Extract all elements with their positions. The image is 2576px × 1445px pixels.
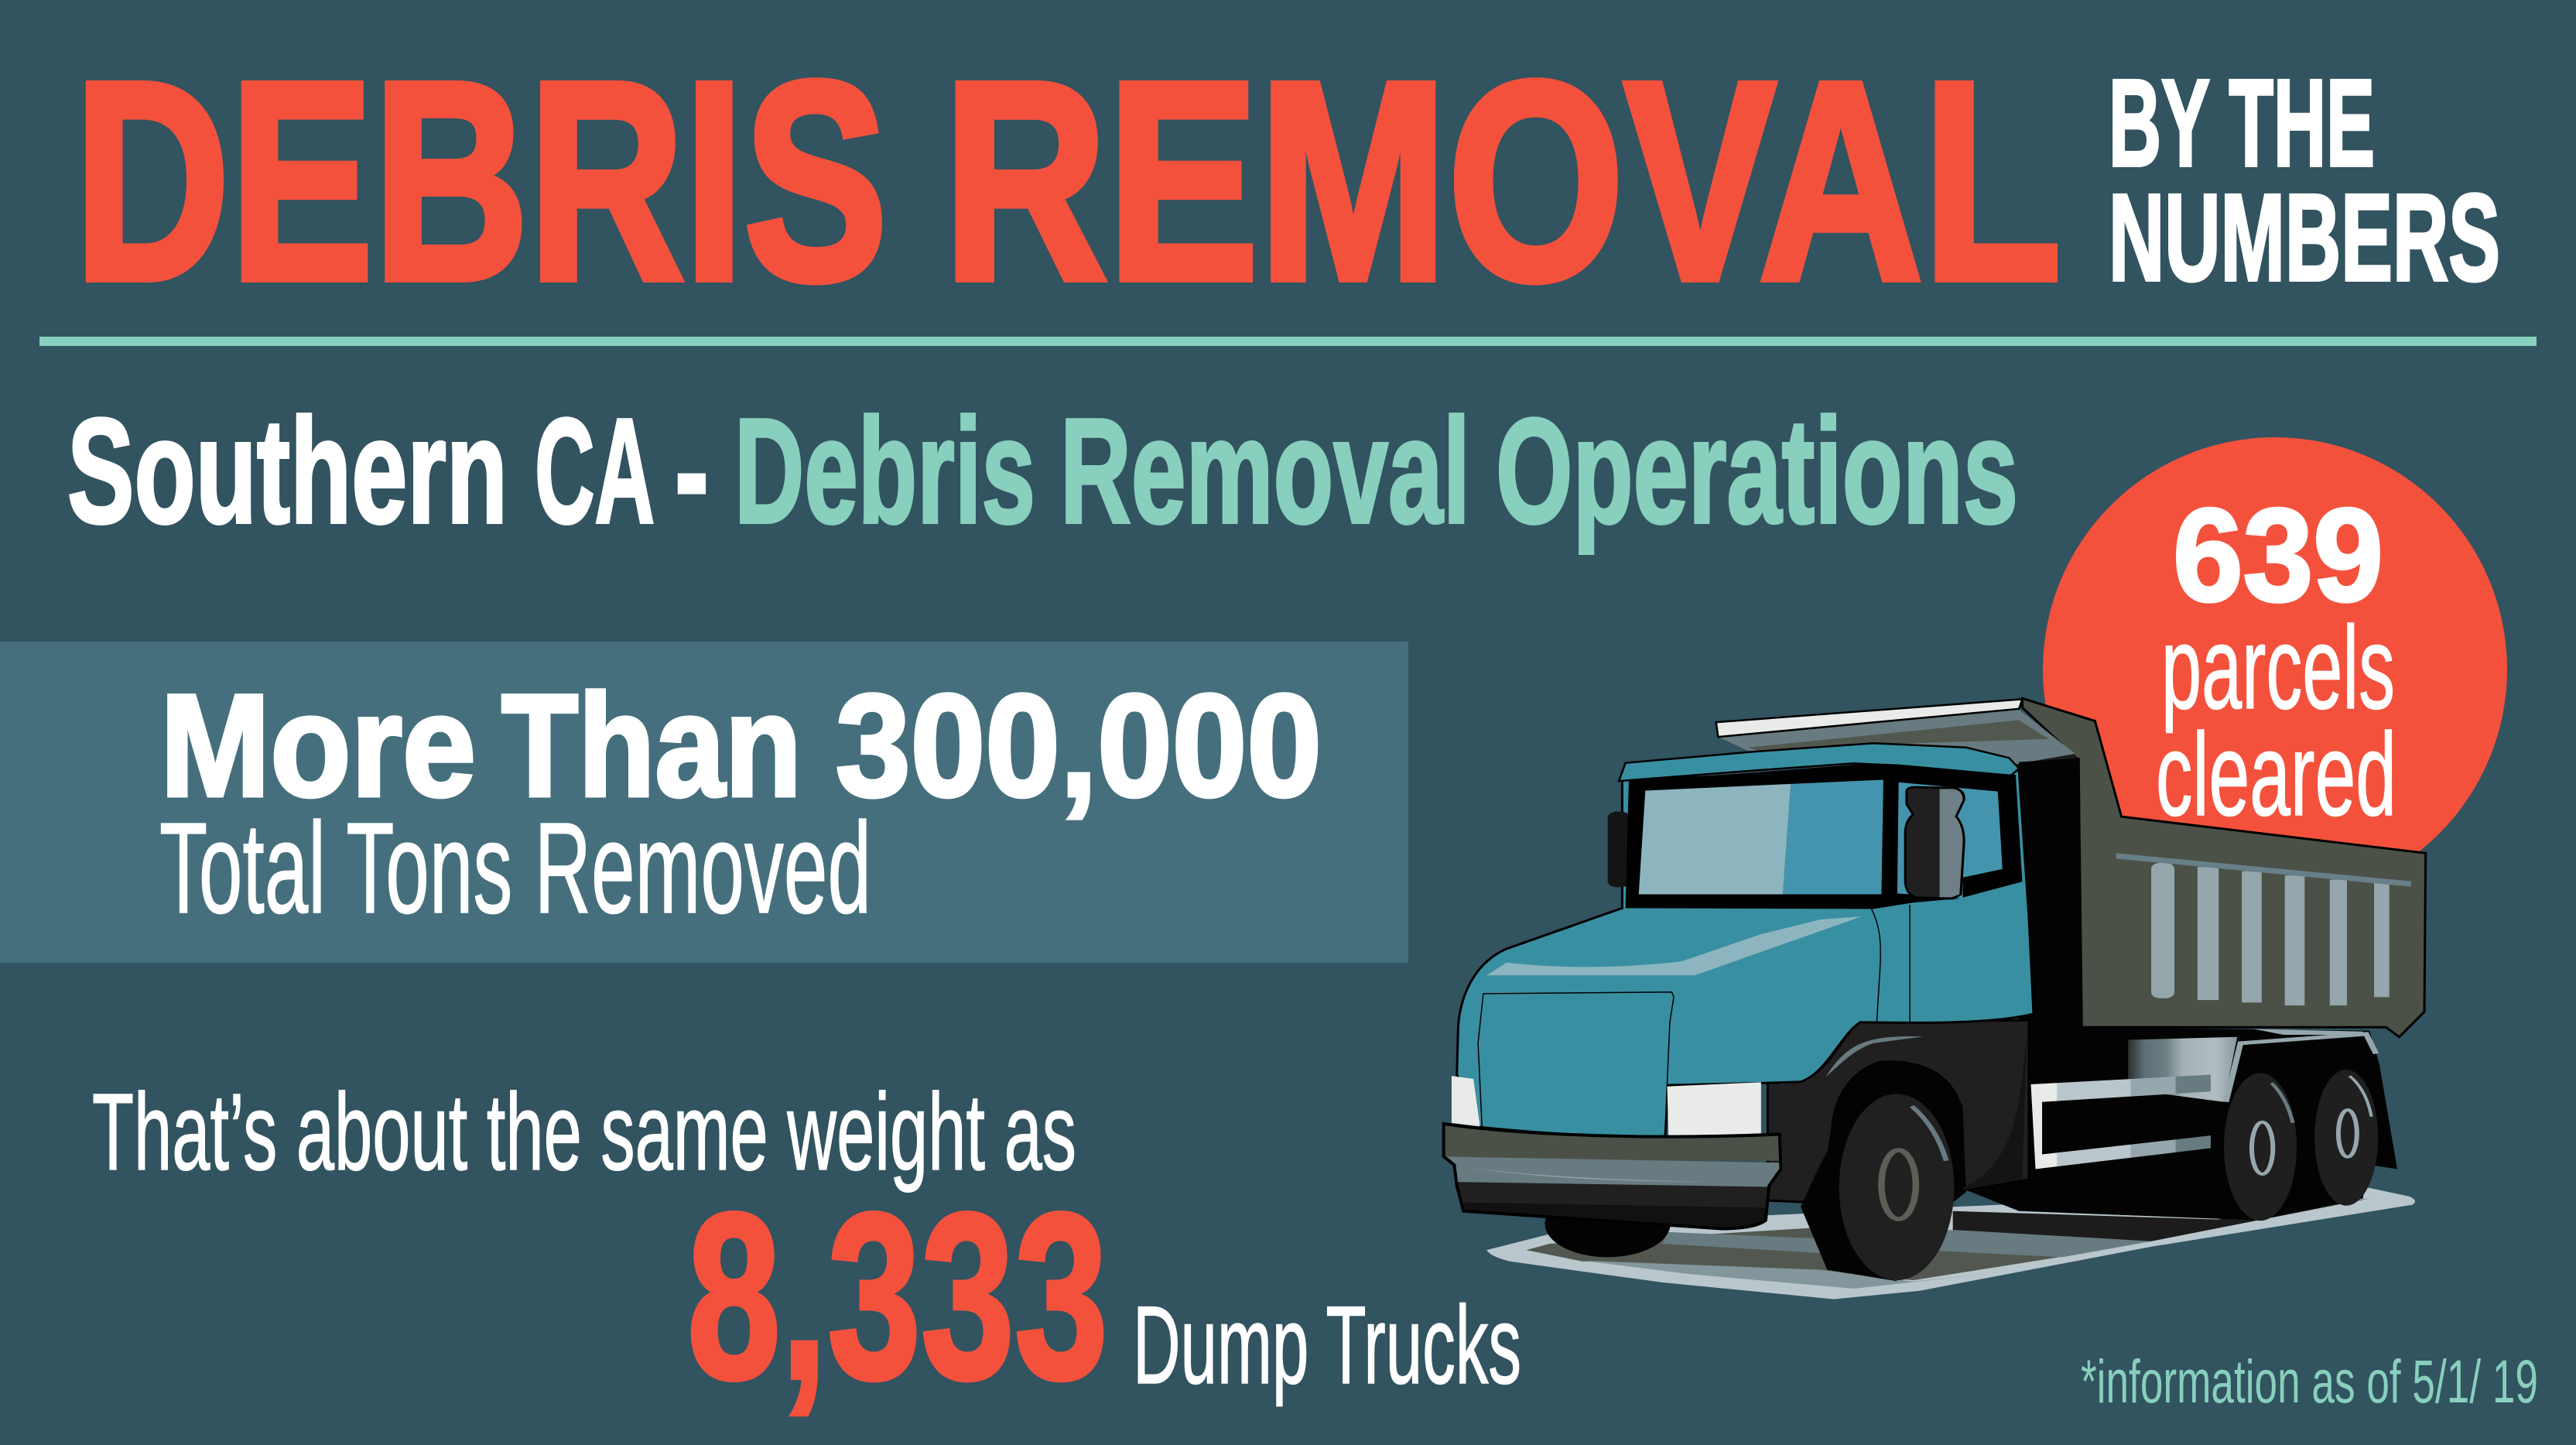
heading: southern ca debris removal operations: - <box>675 387 709 554</box>
subtitle: by the numbers: BY THE <box>2109 53 2375 192</box>
wheel well <box>1821 1062 1966 1253</box>
windshield <box>1639 779 1883 894</box>
left mirror <box>1608 812 1630 887</box>
side rail <box>2031 1075 2211 1169</box>
side window <box>1897 782 2003 899</box>
rear wheels <box>2224 1070 2378 1221</box>
headlights <box>1452 1076 1761 1136</box>
comparison text: That’s about the same weight as <box>92 1070 1076 1193</box>
heading: southern ca debris removal operations: CA <box>535 387 655 554</box>
heading: southern ca debris removal operations: Removal <box>1060 387 1470 554</box>
ground shadow <box>1486 1188 2415 1299</box>
cab body <box>1457 771 2034 1137</box>
stat: more than 300,000: More <box>160 664 476 827</box>
label: cleared: cleared <box>2156 709 2396 841</box>
dump bed <box>2022 698 2426 1037</box>
hood highlight <box>1486 916 1862 975</box>
door lines <box>1872 905 1910 1022</box>
grille outline <box>1478 992 1674 1129</box>
rear chassis <box>1966 758 2397 1221</box>
callout circle: parcels cleared <box>2043 437 2507 902</box>
label: total tons removed: Total Tons Removed <box>159 796 871 940</box>
stat: 8,333: 8,333 <box>687 1164 1108 1428</box>
stat: 639: 639 <box>2173 481 2383 629</box>
heading: southern ca debris removal operations: Debris <box>734 387 1035 554</box>
title: debris removal: DEBRIS <box>74 24 888 339</box>
front fender <box>1767 1020 2029 1203</box>
heading: southern ca debris removal operations <box>67 387 2018 554</box>
divider line <box>39 337 2537 346</box>
heading: southern ca debris removal operations: Southern <box>67 387 508 554</box>
front axle shadow <box>1545 1190 1671 1257</box>
illustration: dump truck <box>1437 698 2426 1299</box>
cab window frame <box>1626 764 2022 909</box>
stat: more than 300,000: 300,000 <box>836 664 1322 827</box>
label: parcels: parcels <box>2161 602 2395 734</box>
cab roof <box>1619 743 2019 781</box>
title: debris removal <box>74 24 2061 339</box>
panel: total tons removed <box>0 642 1408 963</box>
heading: southern ca debris removal operations: Operations <box>1496 387 2018 554</box>
subtitle: by the numbers <box>2109 53 2500 306</box>
bed ribs <box>2151 863 2390 1005</box>
title: debris removal: REMOVAL <box>943 24 2061 339</box>
stat: more than 300,000 <box>160 664 1322 827</box>
front bumper <box>1437 1121 1787 1230</box>
callout text: 639 parcels cleared <box>2156 481 2396 841</box>
stat: more than 300,000: Than <box>501 664 802 827</box>
bed canopy <box>1716 699 2078 785</box>
front wheel <box>1801 1094 1954 1281</box>
side mirror <box>1905 787 1964 899</box>
label: dump trucks: Dump Trucks <box>1133 1284 1521 1407</box>
